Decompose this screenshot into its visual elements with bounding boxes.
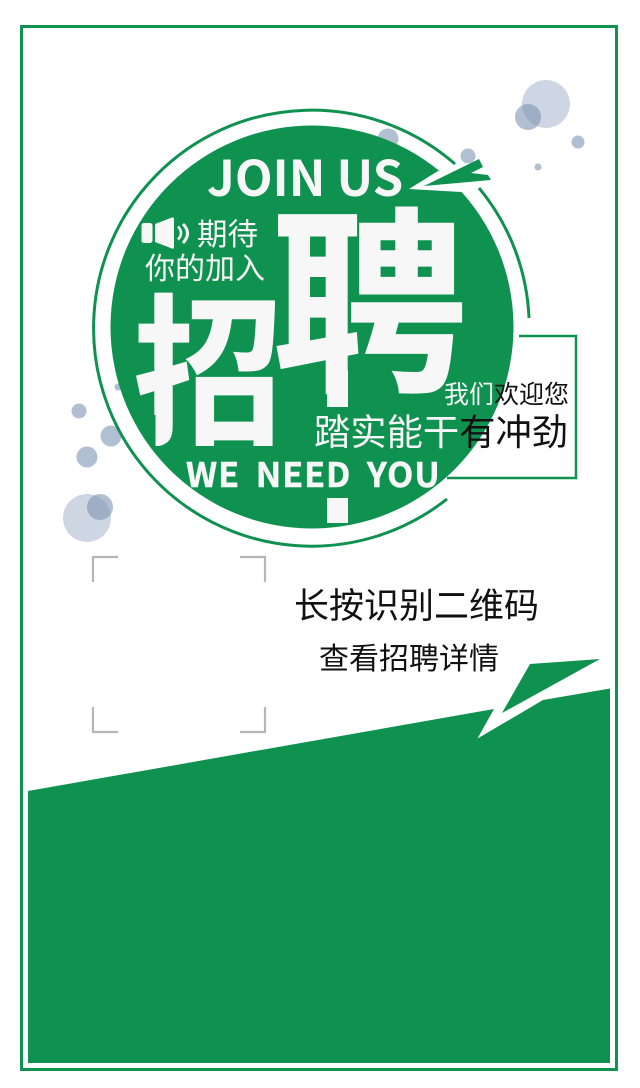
white notch in disc [409,171,466,192]
QR code placeholder corners [93,557,265,732]
green disc [110,126,514,528]
heading: WE NEED YOU: WE NEED YOU [186,448,441,497]
decorative bubbles top right [378,80,584,170]
decorative bubbles lower left [63,384,122,542]
heading: JOIN US: JOIN US [207,140,403,211]
large character: 聘: 聘 [272,146,467,434]
text: 踏实能干有冲劲: 踏实能干有冲劲 [314,404,568,456]
text: 长按识别二维码: 长按识别二维码 [294,578,539,629]
聘 stem extension [327,370,348,523]
welcome box outline [447,336,576,478]
green dart at notch [424,159,491,186]
text: 期待: 期待 [197,210,258,254]
outer circle ring [94,110,529,546]
icon: speaker [142,217,188,249]
text: 我们欢迎您: 我们欢迎您 [444,375,569,411]
large character: 招: 招 [134,243,283,480]
text: 你的加入: 你的加入 [145,244,265,288]
green dart above footer [502,659,600,713]
green footer panel [28,688,610,1063]
text: 查看招聘详情: 查看招聘详情 [319,634,499,678]
